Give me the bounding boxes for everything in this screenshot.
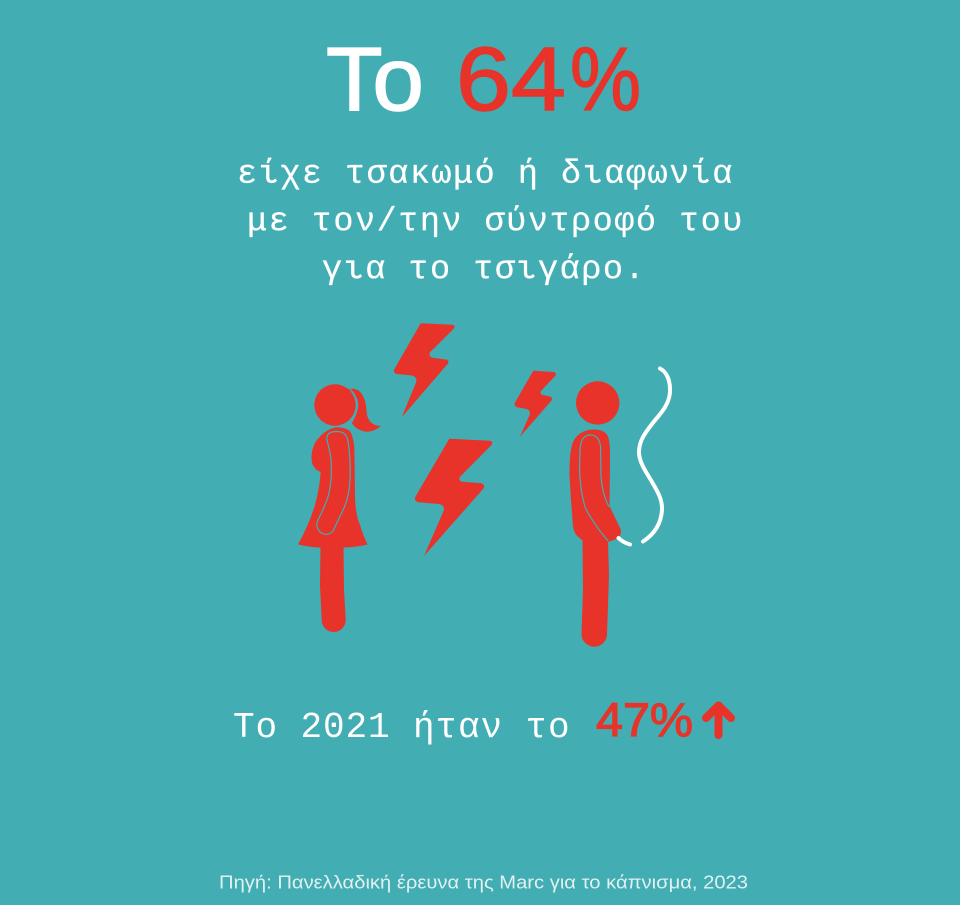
cigarette — [618, 538, 630, 544]
head — [576, 381, 619, 425]
subtitle text block: είχε τσακωμό ή διαφωνία — [237, 156, 734, 194]
figure: woman — [298, 384, 381, 632]
icon: up arrow — [706, 706, 731, 735]
head outline gap — [346, 386, 357, 421]
source note: Πηγή: Πανελλαδική έρευνα της Marc για το κάπνισμα, 2023 — [219, 872, 748, 892]
subtitle text block: με τον/την σύντροφό του — [247, 203, 744, 241]
arm outline — [317, 432, 350, 534]
body — [570, 429, 621, 647]
subtitle text block — [237, 156, 744, 289]
icon: lightning bolt top — [394, 323, 455, 417]
subtitle text block: για το τσιγάρο. — [322, 251, 646, 289]
body and dress — [298, 427, 368, 632]
ponytail — [347, 389, 381, 432]
previous year label: Το 2021 ήταν το — [233, 707, 571, 748]
figure: man smoking — [570, 368, 670, 647]
title: 64 — [456, 30, 566, 130]
title: % — [570, 30, 641, 130]
icon: lightning bolt middle — [415, 439, 492, 556]
icon: lightning bolt small — [515, 371, 556, 437]
title — [326, 30, 641, 130]
head — [314, 384, 356, 426]
smoke — [639, 368, 670, 542]
comparison text — [233, 693, 731, 748]
previous value: 47% — [596, 693, 693, 746]
title: Το — [326, 30, 424, 130]
arm outline — [580, 435, 609, 541]
